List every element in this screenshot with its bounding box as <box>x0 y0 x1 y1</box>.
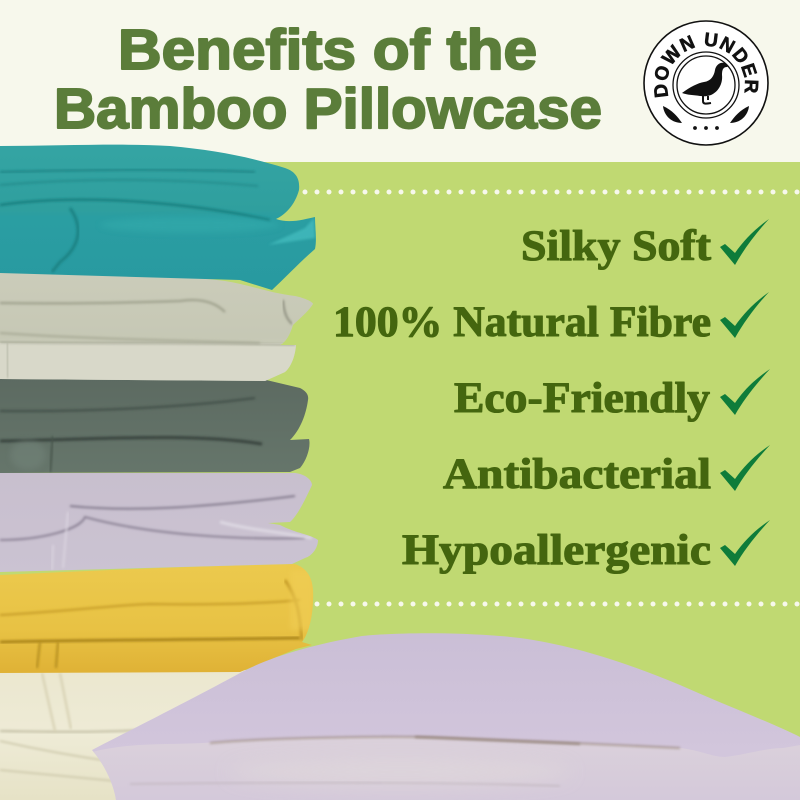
photo: lilac pillow <box>90 630 800 800</box>
pillow lower band <box>94 738 800 758</box>
icon: check 4 <box>720 445 770 491</box>
photo: stack of folded pillowcases <box>0 140 320 800</box>
benefit: antibacterial: Antibacterial <box>443 451 711 498</box>
sage pillowcase <box>0 270 320 382</box>
title: Bamboo Pillowcase <box>54 77 602 141</box>
check marks <box>720 219 770 566</box>
teal pillowcase <box>0 140 320 295</box>
cream pillowcase <box>0 670 260 800</box>
benefit: hypoallergenic: Hypoallergenic <box>402 527 711 574</box>
icon: check 3 <box>720 369 770 415</box>
logo: Down Under badge <box>643 20 769 146</box>
dotted divider bottom <box>317 602 800 606</box>
dark grey-green pillowcase <box>0 376 320 476</box>
icon: check 2 <box>720 292 769 338</box>
icon: left feather <box>663 106 682 123</box>
logo: Down Under badge: DOWN UNDER <box>654 32 759 98</box>
icon: goose <box>682 63 728 96</box>
icon: check 5 <box>720 520 770 566</box>
background: green panel <box>0 162 800 800</box>
icon: right feather <box>730 106 749 123</box>
title <box>54 18 602 141</box>
lilac pillowcase <box>0 470 320 575</box>
yellow pillowcase <box>0 560 320 675</box>
benefit: natural fibre: 100% Natural Fibre <box>333 299 711 346</box>
dotted divider top <box>305 190 800 194</box>
pillow stitching <box>210 737 680 748</box>
title: Benefits of the <box>118 18 537 82</box>
three dots <box>693 126 719 130</box>
benefits list <box>333 223 712 574</box>
icon: check 1 <box>720 219 769 265</box>
benefit: silky soft: Silky Soft <box>521 223 712 270</box>
benefit: eco-friendly: Eco-Friendly <box>454 375 711 422</box>
